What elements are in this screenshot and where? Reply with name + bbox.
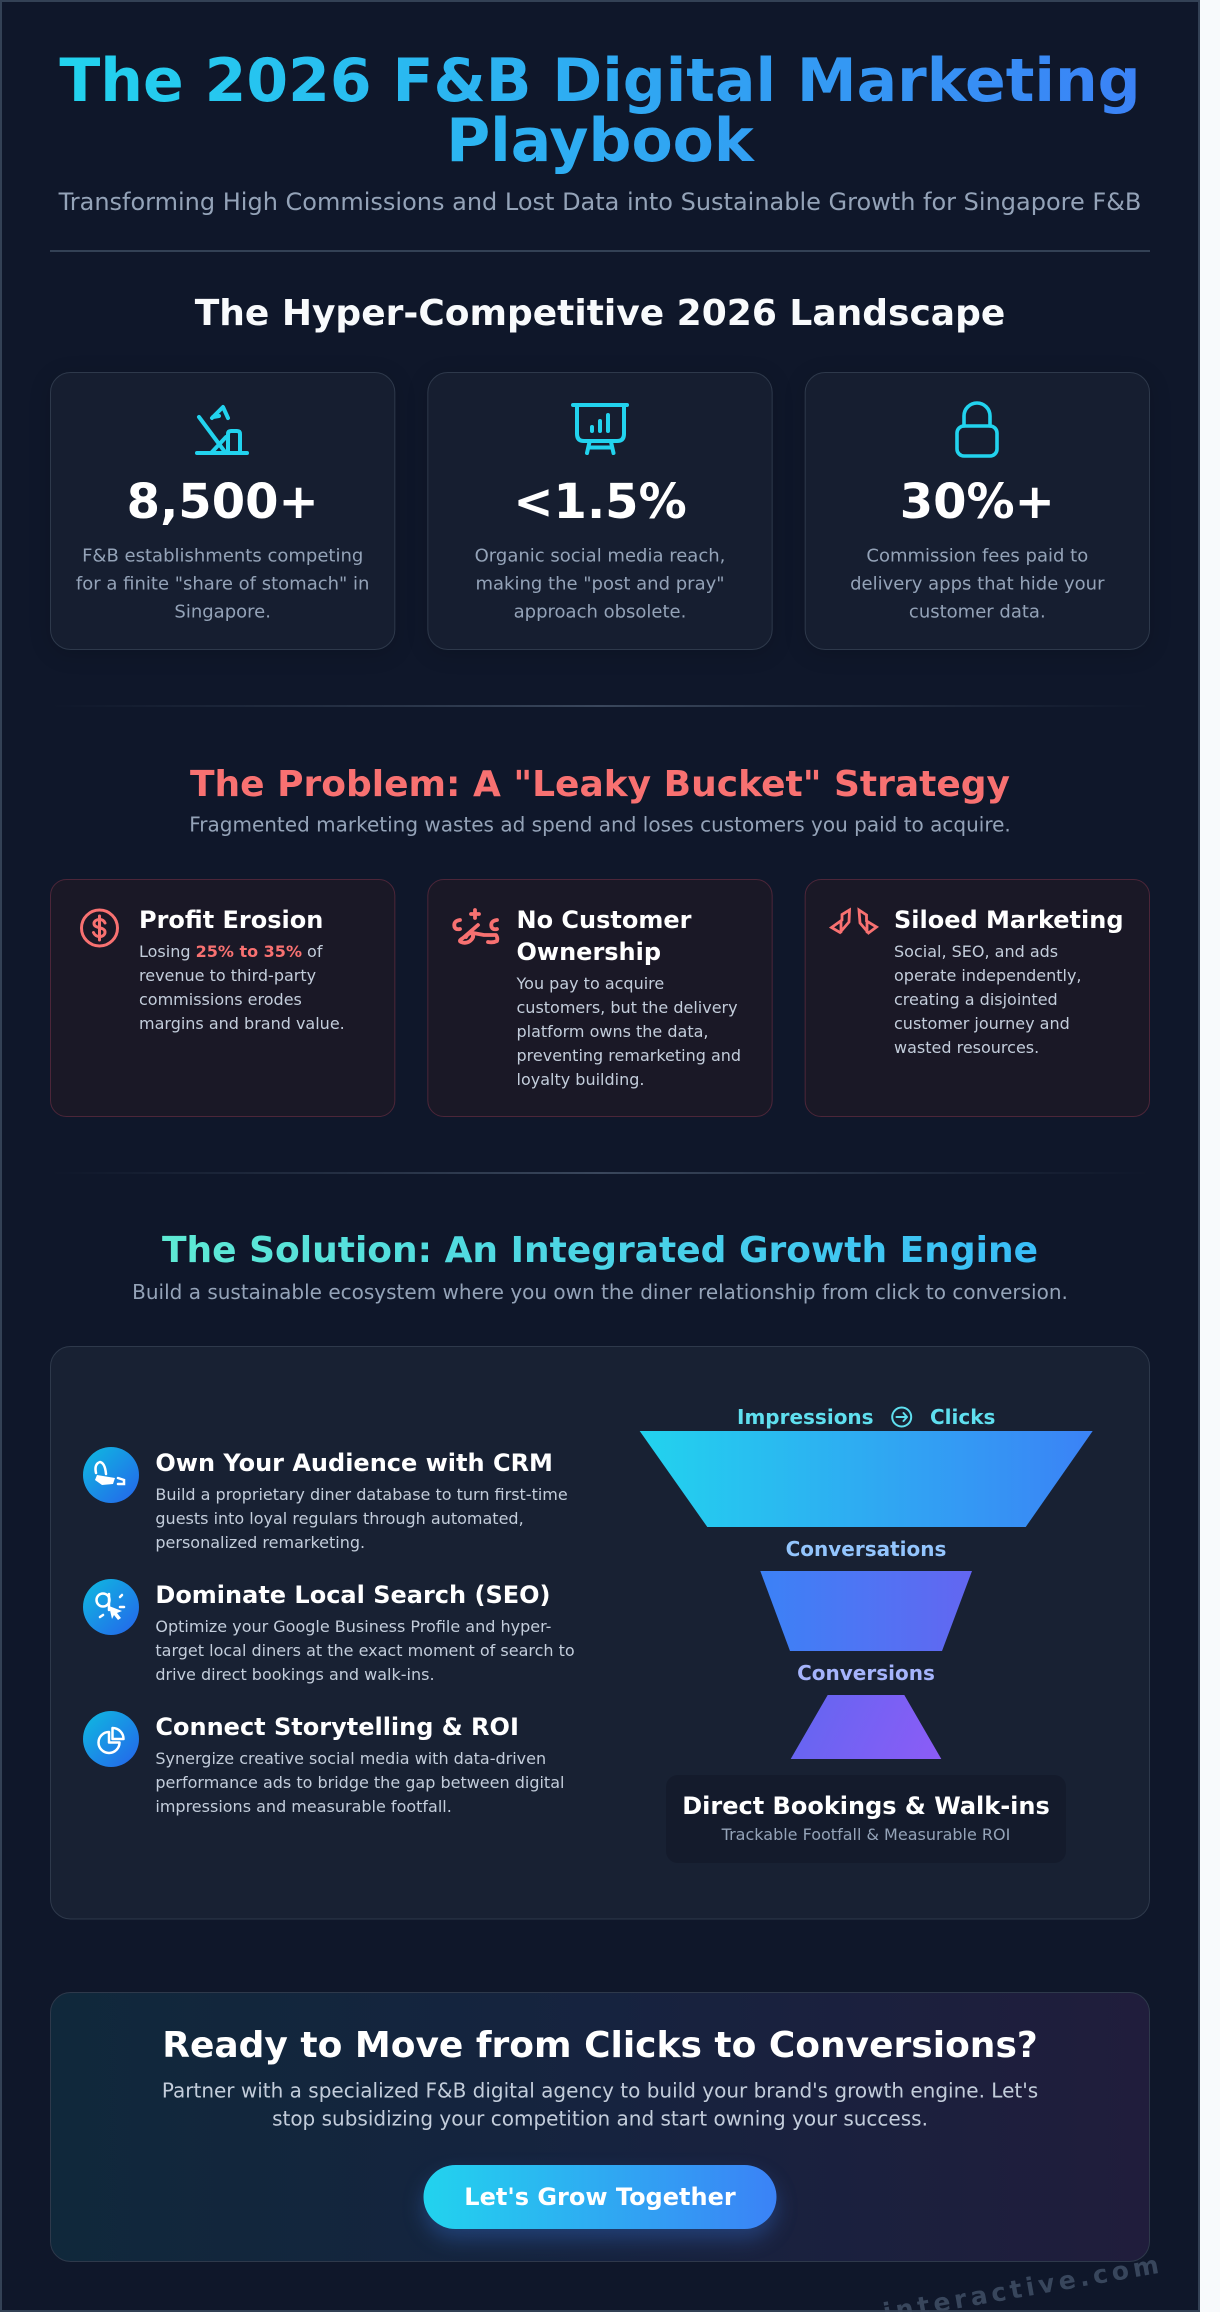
panel: no customer ownership [428,880,772,1116]
icon: CRM [83,1447,139,1503]
card description: customers, but the delivery [516,998,738,1017]
card heading [516,906,692,966]
card heading: Siloed Marketing [894,906,1124,934]
strategy item: storytelling [83,1711,564,1816]
title [59,46,1141,176]
strategy item: SEO [83,1579,575,1684]
icon: search click [83,1579,139,1635]
CTA text: Partner with a specialized F&B digital agency to build your brand's growth engine. Let's [162,2078,1038,2102]
stat description: Commission fees paid to [866,546,1088,566]
card description: wasted resources. [894,1038,1039,1057]
card description [894,942,1082,1057]
funnel label: conversions: Conversions [797,1661,935,1685]
card description: customer journey and [894,1014,1070,1033]
section subheading: solution: Build a sustainable ecosystem where you own the diner relationship from click to conversion. [132,1280,1068,1304]
icon: pie chart [83,1711,139,1767]
item description: Synergize creative social media with data-driven [155,1749,546,1768]
card description: platform owns the data, [516,1022,708,1041]
title: The 2026 F&B Digital Marketing [59,46,1141,116]
stat description: delivery apps that hide your [850,574,1105,594]
item description [155,1485,568,1552]
item description: performance ads to bridge the gap between digital [155,1773,564,1792]
card heading: Profit Erosion [139,906,323,934]
card description: creating a disjointed [894,990,1058,1009]
item description: target local diners at the exact moment of search to [155,1641,575,1660]
card description: preventing remarketing and [516,1046,741,1065]
stat description: making the "post and pray" [475,574,725,594]
CTA text: stop subsidizing your competition and start owning your success. [272,2106,928,2130]
item heading: Connect Storytelling & ROI [155,1713,519,1741]
stat description: Organic social media reach, [475,546,725,566]
stat description: for a finite "share of stomach" in [76,574,369,594]
funnel outcome box: Trackable Footfall & Measurable ROI [721,1825,1010,1844]
funnel outcome box [666,1775,1066,1863]
item description [155,1617,575,1684]
stat description [475,546,725,622]
item description: Build a proprietary diner database to turn first-time [155,1485,568,1504]
card description: loyalty building. [516,1070,644,1089]
section heading: solution: The Solution: An Integrated Growth Engine [162,1230,1038,1271]
card description: operate independently, [894,966,1082,985]
card description: Losing 25% to 35% of [139,942,323,961]
CTA button [424,2165,776,2229]
stat description: F&B establishments competing [82,546,363,566]
card heading: Ownership [516,938,661,966]
section subheading: problem: Fragmented marketing wastes ad spend and loses customers you paid to acquire. [189,812,1011,836]
card description [139,942,345,1033]
stat description: Singapore. [174,602,271,622]
icon: dollar circle [82,910,118,946]
item description: Optimize your Google Business Profile and hyper- [155,1617,551,1636]
panel: integrated growth engine [50,1346,1150,1919]
panel: stat card 8,500+ [50,372,395,650]
stat value: <1.5% [513,474,687,530]
item description: guests into loyal regulars through automated, [155,1509,524,1528]
item description: personalized remarketing. [155,1533,365,1552]
item heading: Own Your Audience with CRM [155,1449,553,1477]
panel: stat card <1.5% [428,372,772,650]
item description [155,1749,564,1816]
section heading: landscape: The Hyper-Competitive 2026 Landscape [195,293,1005,334]
title: Playbook [446,106,756,176]
stat value: 30%+ [900,474,1055,530]
card description: Social, SEO, and ads [894,942,1058,961]
panel: call to action [50,1992,1150,2262]
funnel stage 2 [760,1571,972,1651]
funnel label: impressions to clicks [737,1405,995,1429]
card description [516,974,741,1089]
subtitle: Transforming High Commissions and Lost Data into Sustainable Growth for Singapore F&B [58,188,1141,216]
stat description [850,546,1105,622]
icon: market chart [197,407,247,453]
stat description: approach obsolete. [514,602,686,622]
icon: presentation chart [573,405,627,453]
funnel outcome box: Direct Bookings & Walk-ins [682,1792,1050,1820]
card heading: No Customer [516,906,692,934]
CTA heading: Ready to Move from Clicks to Conversions? [162,2025,1038,2066]
funnel stage 3 [791,1695,941,1759]
panel: siloed marketing [805,880,1150,1116]
card description: margins and brand value. [139,1014,345,1033]
CTA button: Let's Grow Together [464,2183,736,2211]
funnel chart [640,1405,1093,1863]
icon: separated arrows [832,910,876,933]
panel: profit erosion [50,880,395,1116]
panel: stat card 30%+ [805,372,1150,650]
strategy item: CRM [83,1447,568,1552]
funnel label: conversations: Conversations [786,1537,946,1561]
card description: commissions erodes [139,990,302,1009]
stat value: 8,500+ [127,474,319,530]
funnel label: impressions to clicks: Clicks [930,1405,995,1429]
section heading: problem: The Problem: A "Leaky Bucket" Strategy [190,764,1010,805]
stat description [76,546,369,622]
stat description: customer data. [909,602,1046,622]
card description: revenue to third-party [139,966,316,985]
icon: lock [957,403,997,456]
item heading: Dominate Local Search (SEO) [155,1581,551,1609]
item description: drive direct bookings and walk-ins. [155,1665,435,1684]
CTA text [162,2078,1038,2130]
funnel label: impressions to clicks: Impressions [737,1405,874,1429]
icon: broken links [454,910,497,943]
card description: You pay to acquire [516,974,664,993]
item description: impressions and measurable footfall. [155,1797,452,1816]
funnel stage 1 [640,1431,1093,1527]
